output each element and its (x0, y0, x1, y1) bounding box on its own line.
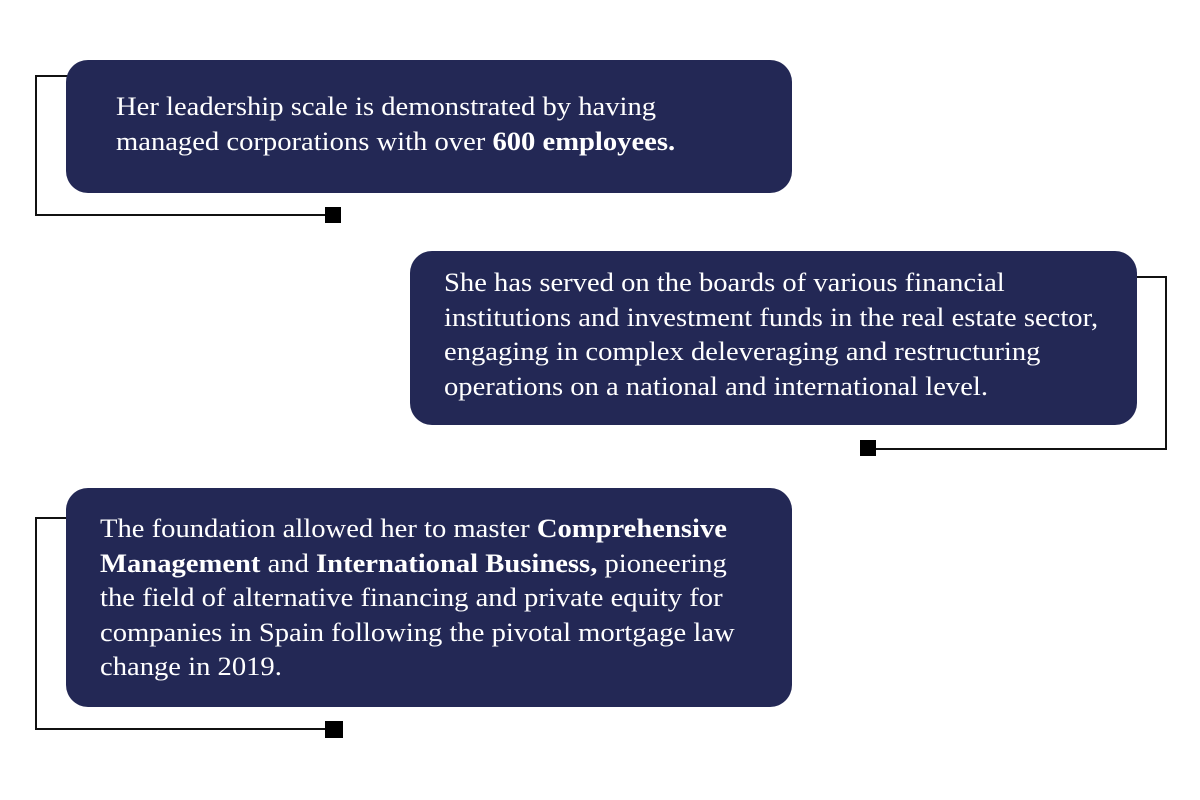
panel: boards (410, 251, 1137, 425)
panel: boards: She has served on the boards of various financial (444, 268, 1005, 297)
panel: foundation: the field of alternative financing and private equity for (100, 583, 723, 612)
panel: boards: institutions and investment funds in the real estate sector, (444, 302, 1098, 332)
panel: foundation: The foundation allowed her to master Comprehensive (100, 514, 727, 543)
panel: boards: engaging in complex deleveraging and restructuring (444, 337, 1040, 366)
square marker 1 (325, 207, 341, 223)
panel: foundation: companies in Spain following the pivotal mortgage law (100, 618, 735, 646)
panel: leadership: managed corporations with over 600 employees. (116, 126, 675, 156)
connector 3 (35, 517, 329, 730)
panel: foundation (66, 488, 792, 707)
panel: leadership (66, 60, 792, 193)
connector 1 (35, 75, 329, 216)
square marker 2 (860, 440, 876, 456)
panel: leadership: Her leadership scale is demonstrated by having (116, 92, 656, 121)
panel: foundation: change in 2019. (100, 652, 282, 681)
square marker 3 (325, 721, 343, 738)
panel: boards: operations on a national and international level. (444, 372, 988, 400)
connector 2 (868, 276, 1167, 450)
panel: foundation: Management and International Business, pioneering (100, 548, 727, 578)
